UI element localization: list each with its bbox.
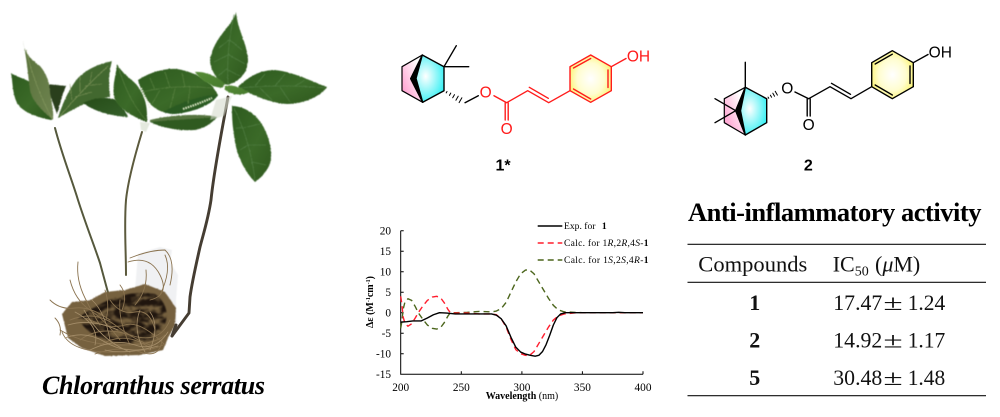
y axis labels: 15 <box>380 246 391 258</box>
atom labels <box>781 44 952 134</box>
leaf cluster: middle shoot <box>113 64 218 130</box>
chemical structure: compound 1 <box>402 46 650 138</box>
row: compound 1: 1 <box>749 290 760 315</box>
white flower spikes <box>140 88 232 132</box>
table header: μM) <box>882 252 920 277</box>
legend: Calc. for 1R,2R,4S-1 <box>564 238 649 249</box>
activity table <box>688 197 986 396</box>
cinnamoyl chain <box>795 51 928 116</box>
x axis labels <box>392 382 652 394</box>
y axis labels: 10 <box>380 266 391 278</box>
dark root core <box>78 293 167 343</box>
atom labels: OH <box>929 44 952 61</box>
table header: IC <box>833 252 855 277</box>
leaf cluster: right shoot <box>195 12 327 182</box>
plant name caption: Chloranthus serratus <box>42 371 265 400</box>
y axis labels: 20 <box>380 226 391 238</box>
plant stems <box>55 97 228 336</box>
x axis labels: 200 <box>392 382 410 394</box>
photo: Chloranthus serratus plant <box>11 12 327 356</box>
y axis title: Δε (M <box>365 302 376 328</box>
y axis labels: -15 <box>376 369 391 381</box>
compound 2 label: 2 <box>804 158 813 175</box>
row: compound 2: 1.17 <box>908 328 945 353</box>
red atom labels: O <box>501 121 513 138</box>
row: compound 5 <box>749 365 945 390</box>
row: compound 1: 1.24 <box>908 290 945 315</box>
root ball <box>50 247 178 356</box>
red atom labels: OH <box>627 48 650 66</box>
row: compound 2: ± <box>883 329 903 353</box>
table header: 50 <box>855 265 869 280</box>
leaf cluster: left shoot <box>11 41 128 120</box>
row: compound 2 <box>749 328 945 353</box>
red cinnamoyl chain <box>494 55 626 120</box>
row: compound 5: 1.48 <box>908 365 945 390</box>
y axis labels: 5 <box>385 287 391 299</box>
red atom labels <box>480 48 650 138</box>
y axis title: -1 <box>366 297 372 302</box>
compound 1 label: 1* <box>495 158 511 175</box>
x axis labels: 350 <box>574 382 591 394</box>
y axis title: cm <box>365 284 376 297</box>
y axis title: -1 <box>366 279 372 284</box>
y axis labels: -10 <box>376 348 391 360</box>
row: compound 1 <box>749 290 945 315</box>
x axis title: Wavelength (nm) <box>486 391 558 402</box>
row: compound 2: 14.92 <box>833 328 882 353</box>
legend: Exp. for 1 <box>564 221 607 232</box>
ECD line chart <box>365 221 652 402</box>
axes <box>401 231 643 374</box>
row: compound 5: 5 <box>749 365 760 390</box>
atom labels: O <box>803 117 815 134</box>
table header: ( <box>875 252 882 277</box>
y axis labels <box>376 226 391 381</box>
atom labels: O <box>781 80 793 98</box>
table header: Compounds <box>698 252 807 277</box>
red atom labels: O <box>480 84 492 102</box>
legend <box>538 221 649 266</box>
row: compound 1: ± <box>883 291 903 315</box>
legend: Calc. for 1S,2S,4R-1 <box>564 255 649 266</box>
fine rootlets <box>50 250 176 354</box>
x axis labels: 250 <box>453 382 470 394</box>
chemical structure: compound 2 <box>715 44 952 135</box>
tan root mass <box>62 284 176 356</box>
bicyclic core <box>402 46 478 103</box>
x axis labels: 400 <box>635 382 652 394</box>
data curves <box>401 270 643 356</box>
y axis title: ) <box>365 276 376 279</box>
row: compound 1: 17.47 <box>833 290 882 315</box>
row: compound 2: 2 <box>749 328 760 353</box>
table header <box>698 252 920 280</box>
y axis labels: -5 <box>382 328 391 340</box>
y axis labels: 0 <box>385 308 391 320</box>
pale paper behind the roots <box>135 247 178 325</box>
table title: Anti-inflammatory activity <box>688 197 982 227</box>
bicyclic core <box>715 62 777 135</box>
row: compound 5: 30.48 <box>833 365 882 390</box>
x axis labels: 300 <box>513 382 531 394</box>
row: compound 5: ± <box>883 366 903 390</box>
